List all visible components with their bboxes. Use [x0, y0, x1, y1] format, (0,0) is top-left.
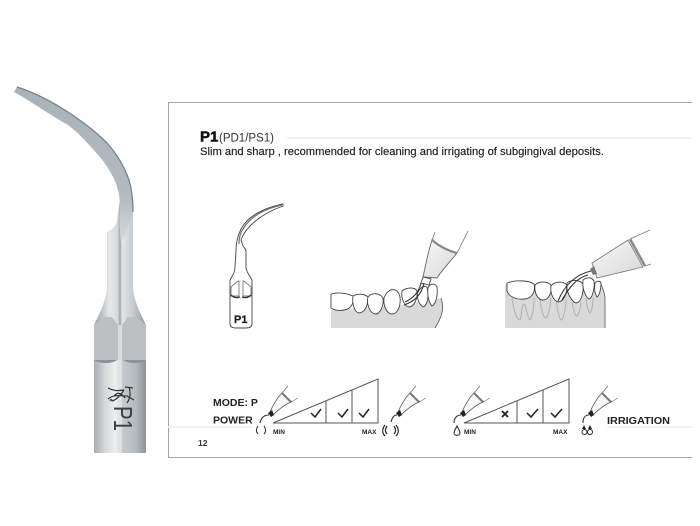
tip label: P1: [234, 314, 247, 326]
title: P1: [200, 128, 218, 146]
shank: [94, 200, 146, 360]
barrel: [94, 360, 146, 453]
handpiece: [558, 230, 651, 301]
mode and power labels: MODE: P: [213, 397, 258, 409]
curved blade: [14, 87, 133, 243]
irrigation handpiece icon: min: [454, 386, 490, 435]
power gauge: MIN: [273, 429, 285, 436]
irrigation handpiece icon: max: [582, 386, 618, 434]
logo mark: [108, 387, 134, 403]
title: [200, 128, 274, 146]
title: (PD1/PS1): [219, 132, 274, 144]
irrigation label: IRRIGATION: [607, 415, 670, 427]
panel frame: [168, 102, 692, 458]
irrigation gauge: MAX: [553, 429, 568, 436]
page number: 12: [198, 438, 208, 448]
mode and power labels: POWER: [213, 414, 253, 426]
power gauge: [273, 379, 378, 436]
mode and power labels: [213, 397, 258, 426]
power gauge: MAX: [362, 429, 377, 436]
scaler tip photo: [14, 87, 146, 453]
illustration: teeth cleaning front view: [331, 231, 468, 328]
power handpiece icon: max: [383, 386, 426, 436]
handpiece: [404, 231, 468, 305]
power handpiece icon: min: [256, 386, 298, 434]
engraved model text: P1: [108, 406, 138, 431]
illustration: teeth cleaning angled view: [505, 230, 651, 328]
hex facets: [94, 317, 146, 360]
tooth roots: [512, 298, 593, 320]
irrigation gauge: MIN: [464, 429, 476, 436]
tip line drawing: [230, 204, 283, 328]
description: Slim and sharp , recommended for cleaning and irrigating of subgingival deposits.: [200, 146, 604, 158]
irrigation gauge: [464, 379, 569, 436]
